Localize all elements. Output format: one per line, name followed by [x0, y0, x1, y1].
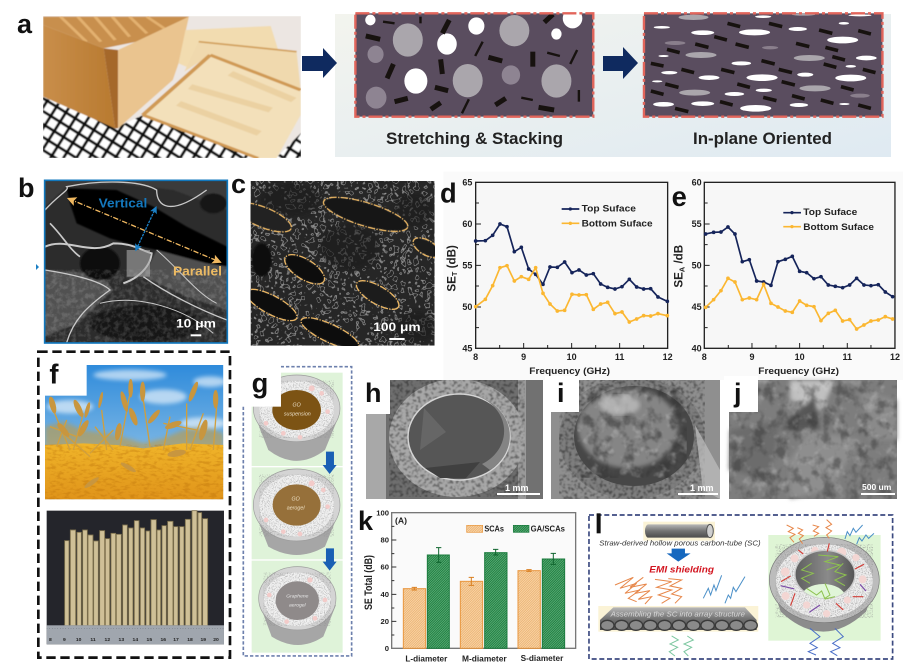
top face of tube: [769, 537, 879, 623]
scale bar: 10 um: 10 μm: [176, 317, 216, 331]
y-axis tick labels k: 60: [380, 563, 389, 572]
reflected waves: blue right: [845, 525, 874, 544]
y-axis tick labels k: [376, 508, 389, 653]
legend e: [783, 207, 874, 232]
axis title: SE total: (dB): [445, 245, 458, 272]
axes d: [476, 182, 668, 348]
bar chart k: [376, 508, 576, 663]
legend k: SCAs: [484, 524, 504, 533]
arrow: vertical direction: [136, 207, 156, 250]
photo: wheat field: [45, 365, 227, 499]
scale bar h: [497, 483, 540, 495]
y-axis tick labels d: 65: [462, 177, 472, 187]
SEM micrograph b: [45, 180, 227, 343]
x-axis tick labels d: [473, 352, 673, 362]
photo: straws with ruler: [47, 511, 224, 644]
y-axis tick labels d: 60: [462, 219, 472, 229]
photo: straws with ruler: 14: [133, 637, 138, 643]
dashed frame l: [589, 515, 893, 659]
tube array: [598, 606, 758, 632]
outer tube body: [770, 578, 879, 632]
label d: d: [440, 177, 457, 208]
series: top surface d: [476, 224, 667, 301]
tube cross-section diagram: [768, 520, 881, 656]
caption: assembling array: Assembling the SC into array structure: [610, 610, 745, 619]
legend e: Top Suface: [803, 207, 857, 217]
category labels k: [405, 653, 564, 663]
dashed frame f: [38, 352, 230, 658]
panel a: bread analogy and process: [17, 8, 891, 158]
photo: straws with ruler: 15: [147, 637, 152, 643]
pink pores: [781, 547, 867, 617]
incident waves: orange right: [787, 520, 832, 544]
bars: GA/SCAs: [427, 553, 565, 648]
transmitted waves: green: [669, 636, 693, 656]
photo: straws with ruler: 16: [161, 637, 166, 643]
photo: straws with ruler: 19: [201, 637, 206, 643]
absorbed waves: red and purple: [781, 543, 866, 612]
y-axis tick labels k: 80: [380, 536, 389, 545]
axis title: SE absorption: SE: [673, 272, 686, 288]
x-axis tick labels e: 10: [795, 352, 805, 362]
arrow: parallel direction: [69, 199, 220, 262]
scale bar h: 1 mm: [505, 483, 529, 493]
photo: straws with ruler: 13: [119, 637, 124, 643]
cylinder: GO suspension: suspension: [284, 411, 311, 417]
label e: e: [672, 181, 687, 212]
label k: k: [358, 506, 374, 536]
background of process schematic: [335, 14, 891, 157]
SEM micrograph h: [366, 379, 543, 499]
panel tag (A): (A): [395, 515, 407, 525]
y-axis tick labels d: 55: [462, 260, 472, 270]
cylinder: GO aerogel: [253, 469, 340, 555]
text: Vertical: Vertical: [99, 197, 147, 211]
x-axis tick labels e: 9: [749, 352, 754, 362]
legend k: GA/SCAs: [531, 524, 566, 533]
reflected waves: blue: [703, 575, 745, 603]
chart background: [443, 172, 673, 380]
axes e: [704, 182, 895, 348]
arrow from bread to schematic: [302, 48, 337, 78]
panel j: SEM aerogel flakes: [724, 376, 897, 499]
y-axis tick labels e: [692, 177, 702, 353]
panel b: SEM image with vertical and parallel arrows: [18, 173, 227, 343]
photo: straws with ruler: 18: [187, 637, 193, 643]
SEM micrograph j: [729, 380, 897, 499]
y-axis tick labels e: 55: [692, 219, 702, 229]
category labels k: L-diameter: [405, 653, 448, 663]
legend k: [467, 524, 566, 533]
scale bar j: [861, 482, 895, 495]
y-axis tick labels e: 60: [692, 177, 702, 187]
series: bottom surface d: [476, 266, 667, 322]
scale bar: 100 um: [373, 320, 421, 340]
panel k: bar chart of SE total: [358, 506, 576, 663]
x-axis tick labels d: 9: [521, 352, 526, 362]
cylinder: graphene aerogel: aerogel: [289, 602, 307, 608]
x-axis tick labels e: 12: [890, 352, 900, 362]
arrow: first step: [323, 452, 337, 474]
y-axis title k: SE Total (dB): [363, 555, 375, 610]
small blue marker: [36, 264, 39, 270]
arrow between schematics: [603, 47, 638, 79]
photo: straws with ruler: 8: [49, 637, 52, 643]
scale bar j: 500 um: [862, 482, 892, 492]
white cutout behind label j: [724, 376, 758, 412]
series: top surface e: [706, 227, 893, 297]
arrow: second step: [323, 548, 337, 571]
white cutout behind label h: [360, 376, 390, 414]
arrow: down to EMI shielding: [667, 549, 691, 562]
heading: EMI shielding: EMI shielding: [649, 564, 714, 574]
panel g: aerogel filling schematic: [242, 365, 352, 656]
incident waves: orange: [615, 577, 682, 604]
panel h: SEM hollow tube: [360, 376, 543, 499]
caption: straw-derived tube: Straw-derived hollow porous carbon-tube (SC): [599, 539, 761, 548]
legend d: [562, 204, 653, 228]
white cutout behind label i: [545, 376, 579, 412]
y-axis tick labels k: 0: [385, 644, 389, 653]
dashed frame g: [243, 367, 352, 656]
panel f: wheat and straw photographs: [38, 352, 230, 658]
schematic: in-plane oriented: [644, 13, 882, 117]
y-axis tick labels k: 100: [376, 508, 389, 517]
panel l: EMI shielding schematic: [589, 513, 893, 659]
hollow centre: [794, 550, 856, 599]
y-axis tick labels d: 45: [462, 343, 472, 353]
y-axis tick labels e: 40: [692, 343, 702, 353]
label a: a: [17, 9, 33, 39]
label f: f: [49, 358, 59, 389]
schematic: stretching and stacking: [355, 8, 593, 117]
panel d: SE total line chart: [440, 172, 673, 380]
photo: straws with ruler: 17: [173, 637, 179, 643]
legend d: Top Suface: [582, 204, 636, 214]
caption: in-plane oriented: In-plane Oriented: [693, 129, 832, 148]
x-axis tick labels e: [702, 352, 900, 362]
category labels k: M-diameter: [462, 653, 507, 663]
photo: straws with ruler: 9: [63, 637, 66, 643]
axis title: SE absorption: A: [677, 266, 686, 272]
label c: c: [231, 169, 246, 199]
series: bottom surface e: [706, 278, 893, 329]
SEM micrograph i: [551, 377, 720, 499]
panel e: SE absorption line chart: [672, 172, 903, 380]
label l: [597, 513, 601, 533]
category labels k: S-diameter: [521, 653, 564, 663]
y-axis tick labels d: 50: [462, 302, 472, 312]
y-axis tick labels k: 20: [380, 617, 389, 626]
label j: j: [733, 378, 742, 408]
axis title: SE absorption: /dB: [673, 245, 686, 267]
axis title: Frequency d: Frequency (GHz): [529, 366, 610, 376]
transmitted waves: blue bottom: [808, 628, 843, 656]
cylinder: GO suspension: [253, 375, 340, 461]
cylinder: graphene aerogel: Graphene: [286, 594, 309, 600]
text: Parallel: Parallel: [173, 264, 222, 278]
cylinder: GO aerogel: GO: [291, 497, 300, 503]
cylinder: GO suspension: GO: [292, 403, 301, 409]
axis title: SE total: T: [450, 271, 459, 276]
y-axis tick labels d: [462, 177, 472, 353]
x-axis tick labels d: 11: [615, 352, 624, 362]
error bars: [412, 548, 556, 590]
photo: straws with ruler: 11: [90, 637, 96, 643]
photo: straws with ruler: 12: [105, 637, 110, 643]
carbon tube: [643, 522, 715, 541]
internal waves: green: [802, 555, 846, 599]
bars: SCAs: [403, 571, 540, 648]
label h: h: [365, 378, 382, 408]
green background l: [768, 535, 881, 641]
white cutout behind label f: [43, 363, 87, 396]
legend e: Bottom Suface: [803, 222, 874, 232]
x-axis tick labels d: 10: [567, 352, 577, 362]
legend d: Bottom Suface: [582, 218, 653, 228]
x-axis tick labels d: 8: [473, 352, 478, 362]
y-axis tick labels k: 40: [380, 590, 389, 599]
axis title: SE total: SE: [445, 276, 458, 292]
axis title: Frequency e: Frequency (GHz): [758, 366, 839, 376]
green background g: [252, 373, 343, 653]
scale bar: 10 um: [176, 317, 216, 336]
x-axis tick labels e: 8: [702, 352, 707, 362]
photo: sliced bread on a wire rack: [43, 16, 301, 158]
white cutout behind label g: [242, 365, 281, 407]
photo: straws with ruler: 10: [76, 637, 82, 643]
x-axis tick labels d: 12: [663, 352, 673, 362]
cylinder: GO aerogel: aerogel: [287, 505, 305, 511]
label i: i: [557, 378, 565, 408]
scale bar i: [678, 483, 718, 495]
scale bar: 100 um: 100 μm: [373, 320, 421, 334]
x-axis tick labels e: 11: [843, 352, 852, 362]
scale bar i: 1 mm: [690, 483, 714, 493]
chart background: [673, 172, 903, 380]
y-axis tick labels e: 45: [692, 302, 702, 312]
label g: g: [252, 368, 268, 399]
cylinder: graphene aerogel: [259, 567, 336, 645]
SEM micrograph c: [232, 181, 443, 355]
y-axis tick labels e: 50: [692, 260, 702, 270]
label b: b: [18, 173, 34, 203]
panel c: SEM image with oriented pore ellipses: [231, 169, 443, 355]
panel i: SEM aerogel in tube: [545, 376, 720, 499]
photo: straws with ruler: 20: [213, 637, 219, 643]
caption: stretching and stacking: Stretching & Stacking: [386, 129, 563, 148]
